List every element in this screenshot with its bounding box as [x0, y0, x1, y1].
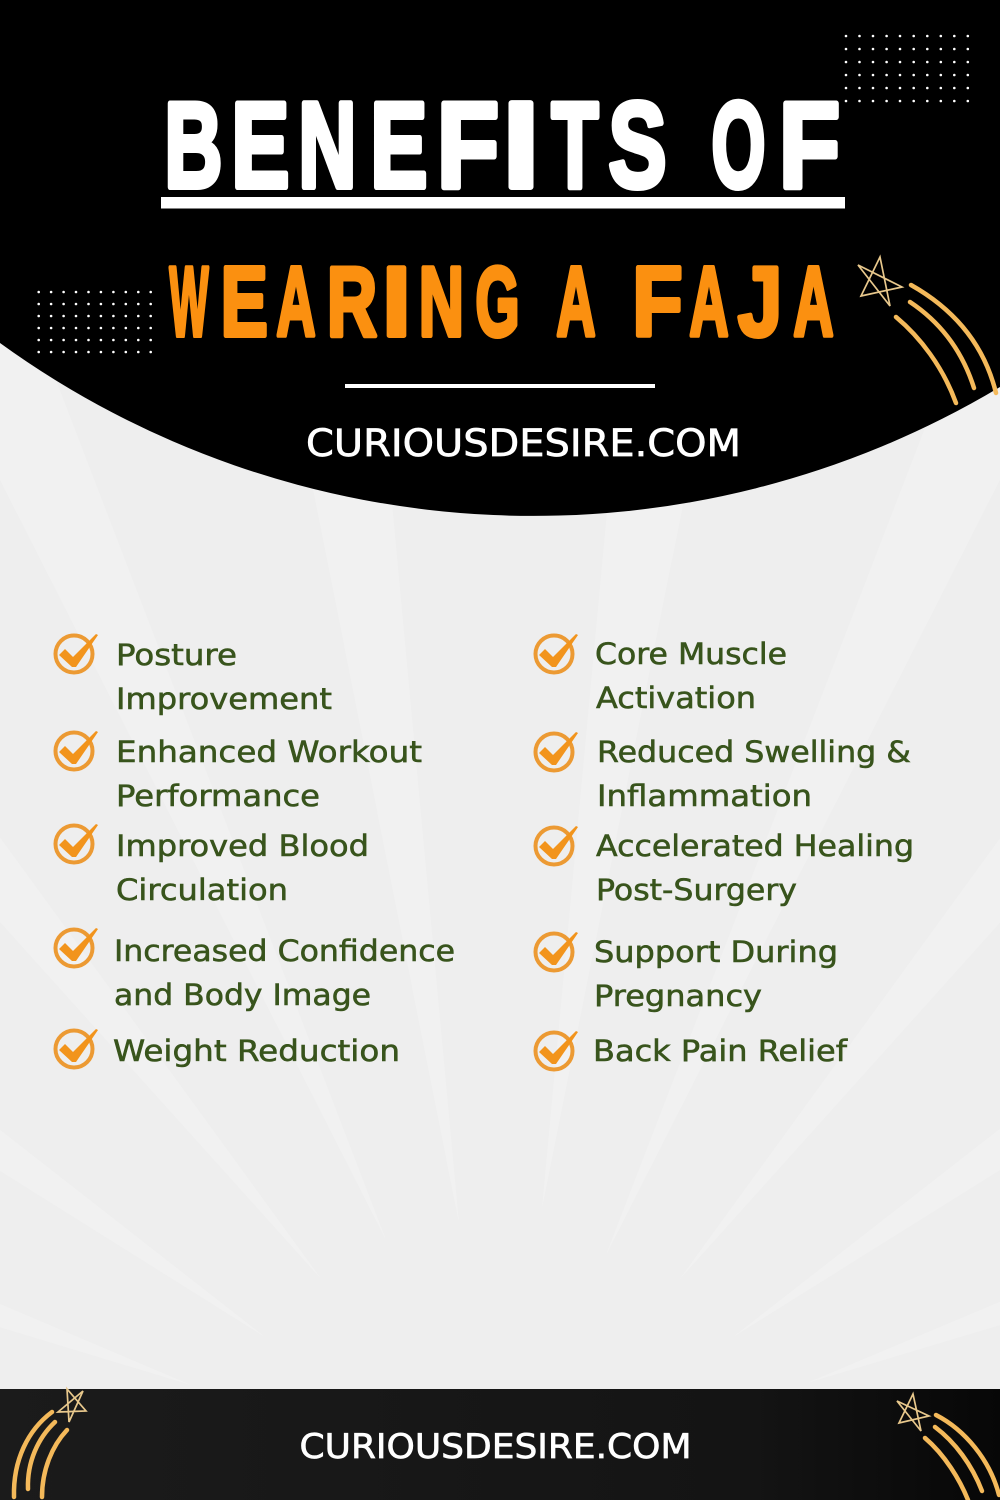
item: increased confidence: Increased Confidence	[114, 934, 455, 968]
item: accelerated healing	[536, 826, 914, 907]
item: back pain relief	[536, 1031, 848, 1070]
heading: wearing a faja: A	[690, 246, 728, 356]
item: reduced swelling	[536, 732, 911, 813]
heading: benefits of: F	[437, 77, 499, 213]
item: improved blood circulation: Improved Blood	[116, 829, 369, 863]
heading: wearing a faja: R	[327, 246, 377, 356]
heading: wearing a faja: I	[382, 246, 410, 356]
list: right column	[536, 634, 914, 1070]
icon: shooting star footer right	[897, 1394, 999, 1500]
heading: benefits of: B	[164, 77, 222, 213]
item: reduced swelling: Reduced Swelling &	[597, 735, 911, 769]
heading: wearing a faja: J	[738, 246, 782, 356]
item: core muscle activation: Core Muscle	[595, 637, 787, 671]
item: weight reduction: Weight Reduction	[113, 1034, 400, 1068]
heading underline	[161, 197, 845, 208]
heading: benefits of: S	[608, 77, 666, 213]
item: improved blood circulation: Circulation	[116, 873, 288, 907]
dot grid: top right	[845, 35, 969, 102]
heading: wearing a faja: A	[794, 246, 834, 356]
footer band	[0, 1389, 1000, 1500]
item: back pain relief: Back Pain Relief	[593, 1034, 848, 1068]
heading: benefits of: E	[231, 77, 289, 213]
heading: benefits of: N	[298, 77, 356, 213]
heading: wearing a faja: W	[170, 246, 209, 356]
list: left column	[56, 634, 455, 1068]
heading: wearing a faja: A	[276, 246, 316, 356]
item: accelerated healing: Accelerated Healing	[596, 829, 914, 863]
item: enhanced workout performance: Enhanced Workout	[116, 735, 422, 769]
item: support during pregnancy	[536, 932, 838, 1013]
item: reduced swelling: Inflammation	[597, 779, 812, 813]
heading: benefits of: O	[712, 77, 766, 213]
item: core muscle activation: Activation	[596, 681, 756, 715]
header black curved panel	[0, 0, 1000, 516]
heading: wearing a faja: G	[476, 246, 520, 356]
item: enhanced workout performance: Performance	[116, 779, 320, 813]
short divider	[345, 384, 655, 388]
item: weight reduction	[56, 1029, 400, 1068]
heading: wearing a faja: N	[419, 246, 464, 356]
heading: wearing a faja: E	[221, 246, 268, 356]
footer website text: CURIOUSDESIRE.COM	[300, 1427, 692, 1467]
heading: benefits of: T	[552, 77, 598, 213]
item: posture improvement: Posture	[116, 638, 237, 672]
icon: shooting star top right	[858, 257, 996, 403]
item: enhanced workout performance	[56, 731, 422, 813]
item: support during pregnancy: Support During	[594, 935, 838, 969]
heading: wearing a faja: A	[556, 246, 596, 356]
item: increased confidence	[56, 928, 455, 1012]
item: posture improvement	[56, 634, 332, 716]
item: accelerated healing: Post-Surgery	[596, 873, 797, 907]
heading: wearing a faja: F	[632, 246, 682, 356]
item: increased confidence: and Body Image	[114, 978, 371, 1012]
heading: benefits of: F	[779, 77, 840, 213]
item: improved blood circulation	[56, 824, 369, 907]
item: posture improvement: Improvement	[116, 682, 332, 716]
dot grid: left	[37, 291, 152, 353]
item: support during pregnancy: Pregnancy	[594, 979, 762, 1013]
item: core muscle activation	[536, 634, 787, 715]
header website text: CURIOUSDESIRE.COM	[306, 422, 741, 465]
heading: benefits of: E	[370, 77, 427, 213]
icon: shooting star footer left	[14, 1389, 86, 1497]
heading: benefits of: I	[503, 77, 539, 213]
